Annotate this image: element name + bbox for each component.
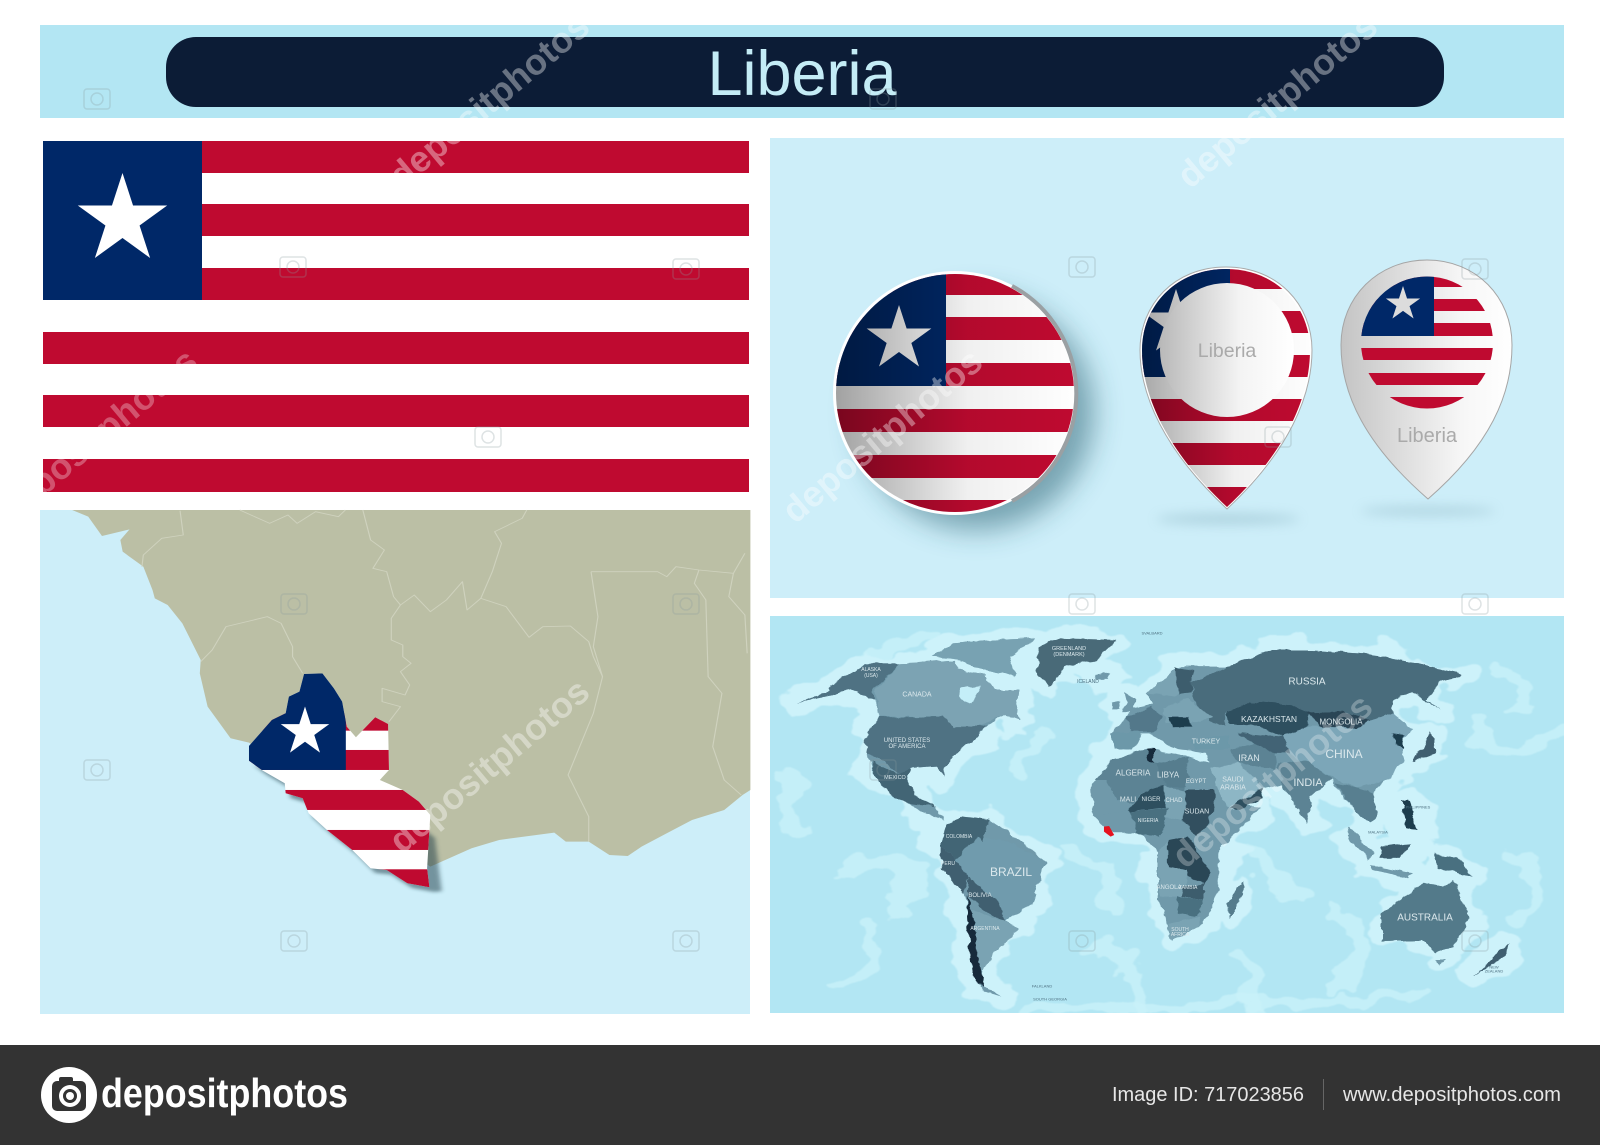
- country labels: UNITED STATES: [884, 738, 930, 744]
- country labels: SOUTH: [1171, 927, 1189, 933]
- country labels: GREENLAND: [1052, 646, 1086, 652]
- icon: depositphotos camera logo: [41, 1067, 97, 1123]
- country borders: [142, 510, 747, 842]
- land and countries: [795, 638, 1510, 997]
- watermarks: depositphotos: [381, 670, 597, 861]
- watermarks: depositphotos: [1164, 685, 1380, 876]
- top banner: [40, 25, 1564, 118]
- pin label: Liberia: [1397, 425, 1458, 447]
- country labels: EGYPT: [1186, 779, 1207, 785]
- country labels: OF AMERICA: [888, 744, 926, 750]
- country labels: MONGOLIA: [1319, 718, 1363, 726]
- country labels: LIBYA: [1157, 770, 1180, 780]
- ocean labels: ZEALAND: [1485, 968, 1503, 974]
- regional land mass: [72, 510, 750, 867]
- country labels: BOLIVIA: [968, 893, 992, 899]
- country labels: TURKEY: [1192, 738, 1221, 746]
- country labels: CANADA: [902, 692, 932, 698]
- pin label: Liberia: [1198, 340, 1256, 362]
- country labels: SAUDI: [1222, 776, 1244, 784]
- country labels: PERU: [941, 861, 955, 867]
- countries: [795, 638, 1510, 987]
- country labels: SUDAN: [1185, 808, 1209, 816]
- map pin with disc flag: [1341, 260, 1512, 515]
- country labels: CHINA: [1325, 747, 1363, 761]
- panel: flag of Liberia: [43, 141, 749, 492]
- watermarks: depositphotos: [381, 5, 597, 196]
- ocean labels: SVALBARD: [1141, 630, 1163, 636]
- image id: Image ID: 717023856: [1112, 1084, 1304, 1106]
- country labels: (USA): [864, 673, 878, 679]
- logo wordmark: depositphotos: [101, 1070, 348, 1116]
- ocean labels: [1032, 630, 1503, 1002]
- website: www.depositphotos.com: [1342, 1084, 1561, 1106]
- title: Liberia: [707, 39, 898, 109]
- country labels: NIGER: [1141, 797, 1161, 803]
- country labels: ARABIA: [1220, 784, 1246, 792]
- Liberia shadow: [254, 765, 442, 892]
- country labels: RUSSIA: [1288, 676, 1326, 688]
- watermark camera icons: [84, 89, 1488, 951]
- map pin with flag: [1130, 260, 1320, 524]
- watermarks: depositphotos: [1169, 5, 1385, 196]
- country labels: (DENMARK): [1053, 652, 1085, 658]
- panel: regional map: [40, 510, 750, 1014]
- country labels: ANGOLA: [1156, 885, 1182, 891]
- country labels: INDIA: [1293, 777, 1323, 789]
- country labels: ALGERIA: [1116, 768, 1151, 778]
- country labels: MEXICO: [884, 775, 907, 781]
- country labels: MALI: [1120, 796, 1136, 804]
- Liberia highlight: [1104, 826, 1114, 837]
- country labels: AUSTRALIA: [1397, 912, 1453, 924]
- ocean labels: MALAYSIA: [1368, 830, 1388, 834]
- country labels: AFRICA: [1171, 932, 1190, 938]
- country labels: [861, 646, 1453, 938]
- circular flag badge: [830, 270, 1094, 530]
- watermarks: [0, 5, 1385, 876]
- panel: flag badges: [770, 138, 1564, 598]
- country labels: ZAMBIA: [1179, 885, 1198, 891]
- panel: world map: [770, 616, 1564, 1013]
- country labels: KAZAKHSTAN: [1241, 714, 1297, 724]
- title pill: [166, 37, 1444, 107]
- watermarks: depositphotos: [774, 340, 990, 531]
- ocean labels: NEW: [1489, 964, 1499, 970]
- country labels: IRAN: [1238, 753, 1260, 763]
- country labels: ALASKA: [861, 667, 881, 673]
- country labels: CHAD: [1165, 798, 1183, 804]
- Liberia flag map: [249, 674, 430, 888]
- country labels: BRAZIL: [990, 865, 1032, 879]
- ocean labels: FALKLAND: [1032, 984, 1052, 988]
- footer bar: [0, 1045, 1600, 1145]
- country labels: ARGENTINA: [970, 926, 1000, 932]
- country labels: NIGERIA: [1138, 818, 1159, 824]
- pin inner disc: [1160, 283, 1294, 417]
- continent halo: [795, 638, 1510, 997]
- ocean labels: PHILIPPINES: [1406, 804, 1431, 810]
- ocean labels: ICELAND: [1077, 679, 1099, 685]
- country labels: COLOMBIA: [946, 834, 973, 840]
- ocean labels: SOUTH GEORGIA: [1033, 996, 1067, 1002]
- ocean currents: [788, 637, 1561, 1010]
